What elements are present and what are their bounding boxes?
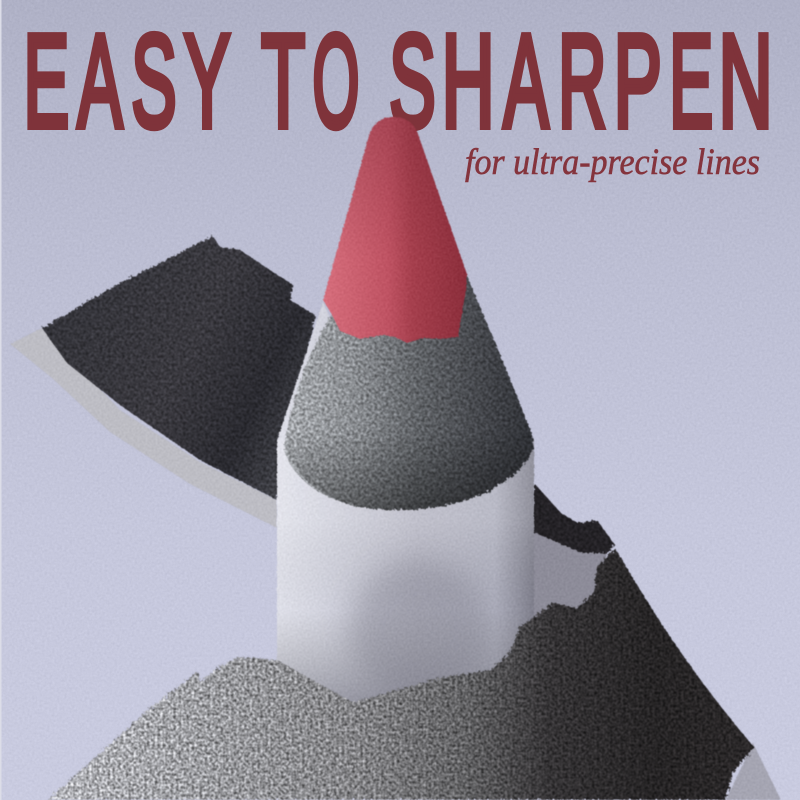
red lip liner tip: [323, 117, 467, 343]
central pencil: [277, 117, 534, 720]
left pencil shaving: [10, 236, 315, 528]
title: EASY TO SHARPEN: [24, 8, 773, 154]
title: EASY TO SHARPEN: P: [614, 8, 662, 154]
light left edge: [0, 0, 2, 800]
title: EASY TO SHARPEN: S: [389, 8, 436, 154]
subtitle: for ultra-precise lines: [465, 142, 760, 183]
pencil wood body: [277, 290, 534, 720]
title: EASY TO SHARPEN: R: [558, 8, 606, 154]
title: EASY TO SHARPEN: Y: [184, 8, 230, 154]
shaving wood strip: [10, 328, 277, 528]
title: EASY TO SHARPEN: E: [669, 8, 713, 154]
foreground pencil shaving: [48, 548, 781, 800]
graphite-grey cone: [284, 274, 533, 510]
title: EASY TO SHARPEN: E: [24, 8, 69, 154]
fragment wood: [530, 530, 607, 650]
foreground light wood corner: [726, 743, 781, 800]
fragment dark edge: [532, 483, 615, 553]
shaving dark outer surface: [42, 236, 315, 500]
title: EASY TO SHARPEN: H: [442, 8, 495, 154]
title: EASY TO SHARPEN: A: [78, 8, 122, 154]
foreground textured shaving: [48, 548, 754, 800]
title: EASY TO SHARPEN: S: [131, 8, 177, 154]
back shaving fragment: [530, 483, 615, 650]
title: EASY TO SHARPEN: T: [261, 8, 305, 154]
title: EASY TO SHARPEN: A: [504, 8, 548, 154]
title: EASY TO SHARPEN: O: [312, 8, 359, 154]
